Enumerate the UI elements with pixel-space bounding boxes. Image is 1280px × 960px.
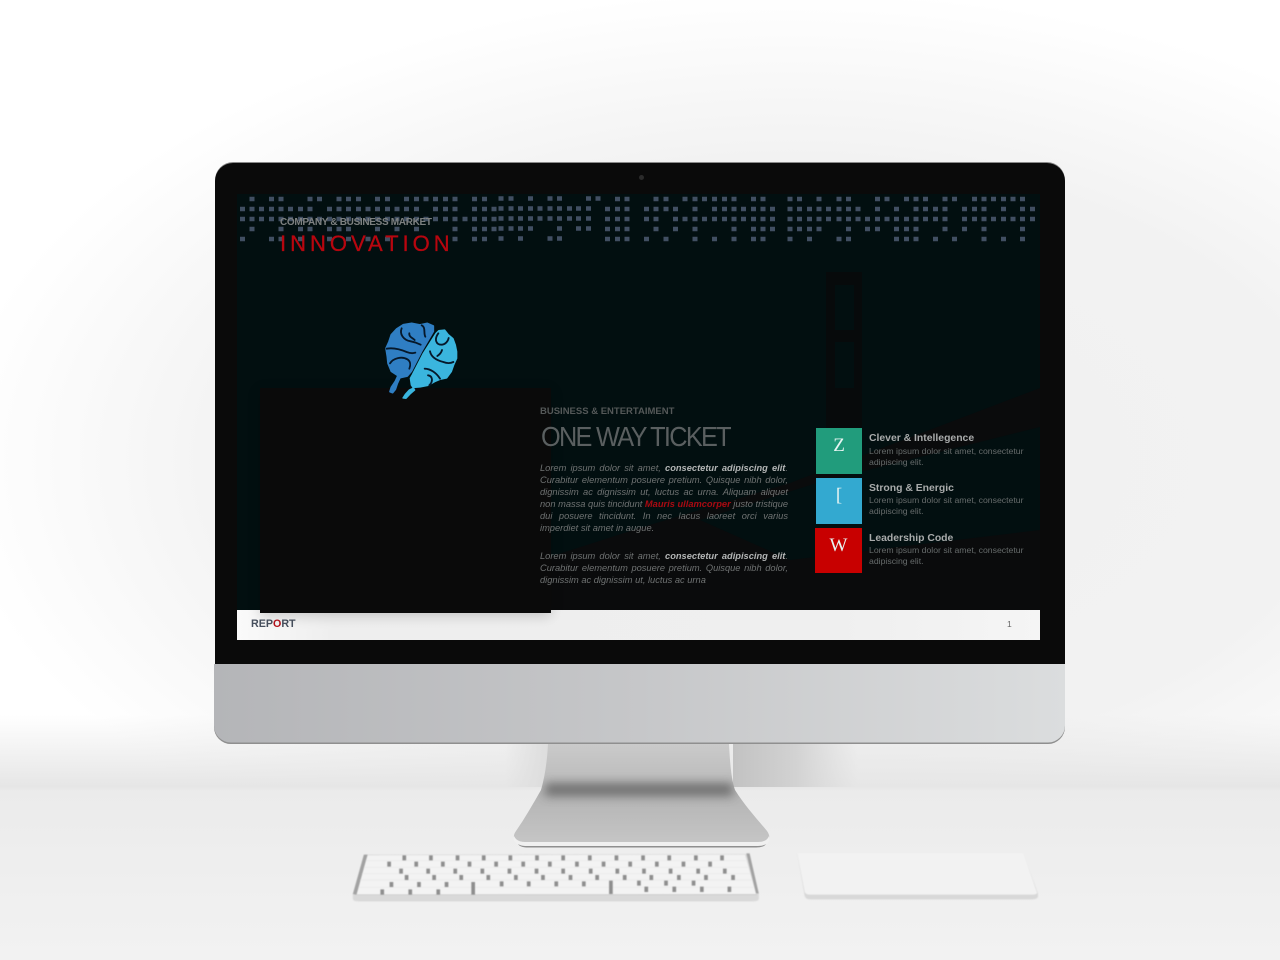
background bridge silhouette [237, 194, 1040, 640]
paragraph two: Lorem ipsum dolor sit amet, consectetur adipiscing elit. [540, 551, 788, 561]
paragraph two: dignissim ac dignissim ut, luctus ac urna [540, 575, 706, 585]
paragraph one: dui posuere tincidunt. In nec lacus laoreet orci varius [540, 511, 788, 521]
feature heading: Strong & Energic [869, 483, 954, 494]
feature description [869, 545, 1024, 566]
feature heading: Leadership Code [869, 533, 953, 544]
feature description: adipiscing elit. [869, 457, 924, 467]
paragraph one: dignissim ac dignissim ut, luctus ac urna. Aliquam aliquet [540, 487, 788, 497]
monitor chin [214, 664, 1065, 744]
camera [639, 175, 644, 180]
dark image panel [260, 388, 551, 613]
monitor bezel [215, 163, 1065, 664]
icon tile W: W [830, 535, 847, 556]
monitor stand [514, 744, 836, 848]
feature: leadership code [815, 528, 1024, 573]
icon: brain [385, 322, 458, 399]
footer label: REPORT [251, 618, 296, 630]
trackpad [804, 888, 1038, 900]
feature description: adipiscing elit. [869, 556, 924, 566]
header subtitle: COMPANY & BUSINESS MARKET [280, 217, 432, 228]
brain left hemisphere [386, 323, 433, 393]
feature description [869, 495, 1024, 516]
feature description: Lorem ipsum dolor sit amet, consectetur [869, 545, 1024, 555]
page number: 1 [1007, 619, 1012, 629]
feature: clever and intelligence [816, 428, 1024, 474]
feature: strong and energic [816, 478, 1024, 524]
footer bar [237, 610, 1040, 640]
feature description: Lorem ipsum dolor sit amet, consectetur [869, 446, 1024, 456]
header title: INNOVATION [280, 231, 454, 256]
paragraph one: imperdiet sit amet in augue. [540, 523, 654, 533]
article heading: ONE WAY TICKET [541, 421, 730, 452]
pixel pattern band [240, 196, 1035, 242]
paragraph two: Curabitur elementum posuere pretium. Quisque nibh dolor, [540, 563, 788, 573]
icon tile bracket [816, 478, 862, 524]
feature description: adipiscing elit. [869, 506, 924, 516]
paragraph one: Lorem ipsum dolor sit amet, consectetur adipiscing elit. [540, 463, 788, 473]
feature description: Lorem ipsum dolor sit amet, consectetur [869, 495, 1024, 505]
screen slide [237, 194, 1040, 640]
icon tile bracket: [ [836, 485, 842, 506]
brain right hemisphere [403, 330, 457, 398]
icon tile Z: Z [833, 435, 845, 456]
paragraph one [540, 463, 788, 533]
paragraph one: non massa quis tincidunt Mauris ullamcorper justo tristique [540, 499, 788, 509]
feature description [869, 446, 1024, 467]
feature heading: Clever & Intellegence [869, 433, 974, 444]
icon tile Z [816, 428, 862, 474]
keyboard [352, 852, 760, 902]
icon tile W [815, 528, 862, 573]
paragraph two [540, 551, 788, 585]
paragraph one: Curabitur elementum posuere pretium. Quisque nibh dolor, [540, 475, 788, 485]
article eyebrow: BUSINESS & ENTERTAIMENT [540, 406, 674, 417]
